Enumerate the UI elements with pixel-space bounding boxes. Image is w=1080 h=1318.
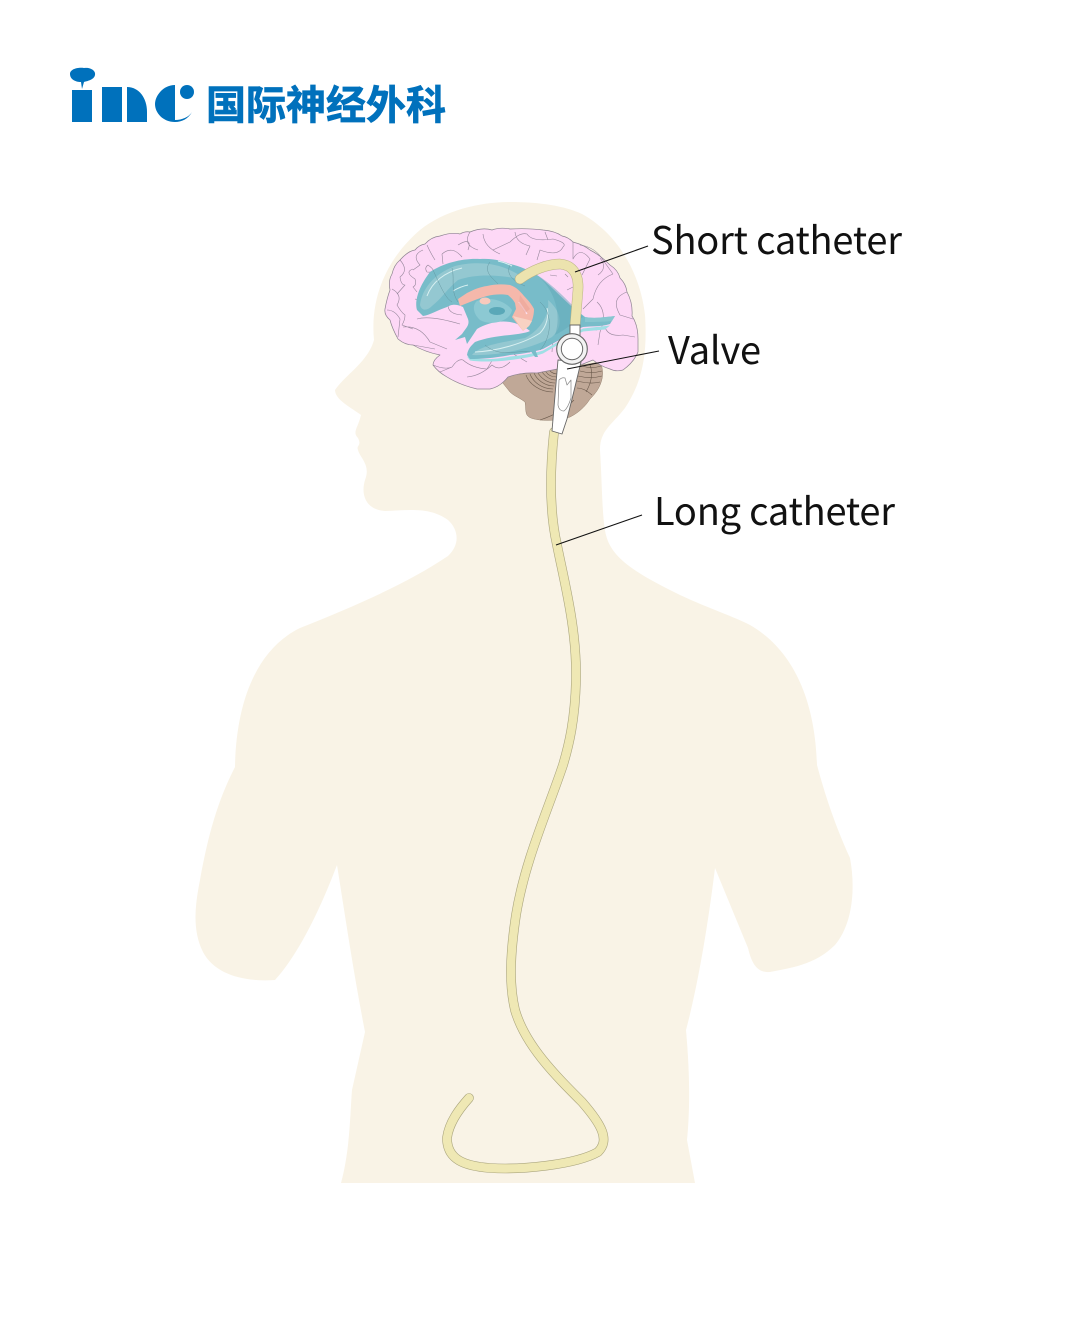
third ventricle centre <box>474 299 512 323</box>
cerebellum <box>502 362 603 420</box>
ventricle <box>416 259 615 362</box>
caudate pink <box>458 284 534 331</box>
long catheter <box>447 432 604 1168</box>
logo: INC <box>70 68 194 122</box>
brain illustration <box>385 228 638 420</box>
logo text: 国际神经外科 <box>206 73 446 131</box>
gyri lines <box>387 232 635 377</box>
cerebrum <box>385 228 638 389</box>
leader lines <box>556 246 659 545</box>
short catheter <box>520 264 578 326</box>
valve <box>552 325 587 434</box>
label: valve: Valve <box>668 320 761 375</box>
label: long catheter: Long catheter <box>654 481 895 536</box>
body silhouette <box>196 202 853 1183</box>
label: short catheter: Short catheter <box>651 210 902 265</box>
